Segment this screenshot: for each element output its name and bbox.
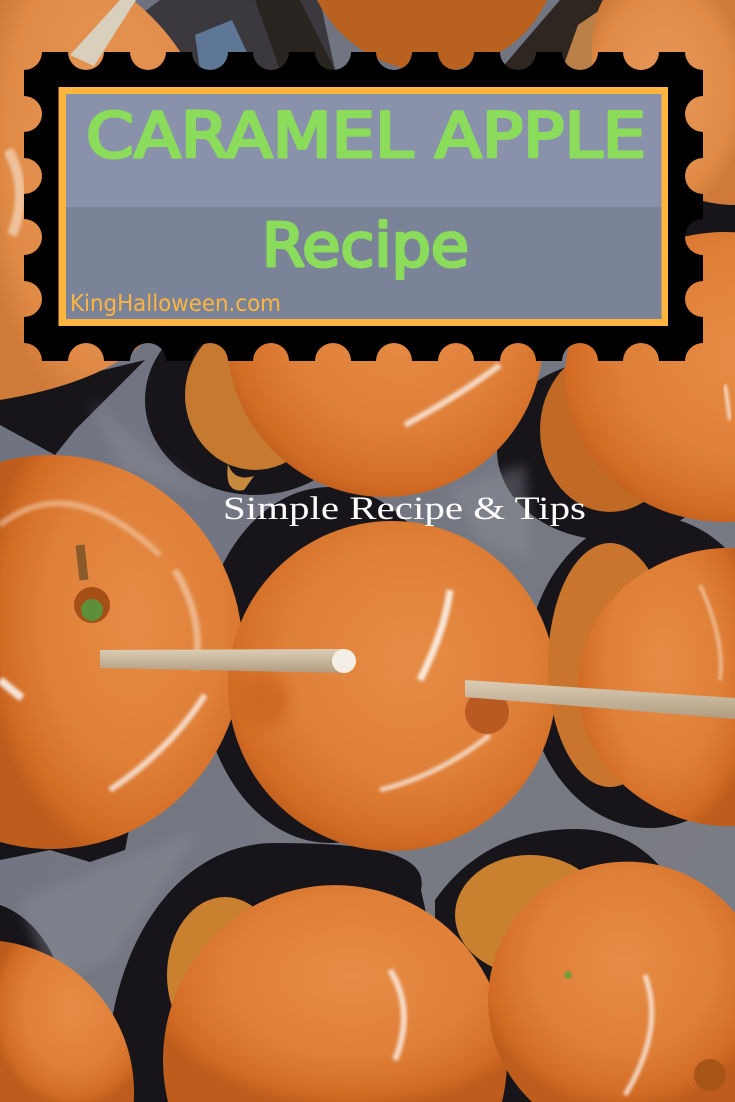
apple dimple (74, 545, 110, 623)
stamp frame (24, 52, 703, 361)
apple: top centre (317, 0, 547, 72)
subtitle: Simple Recipe & Tips (223, 491, 586, 527)
apple: bottom centre (163, 885, 507, 1102)
apple: top left (0, 0, 218, 400)
apple: bottom left (0, 941, 134, 1102)
stick: left apple (100, 649, 356, 673)
apple: left large (0, 455, 243, 849)
top glass tray pieces (120, 0, 603, 70)
apple: centre (228, 521, 556, 851)
stick: centre apple (465, 680, 735, 719)
apple: bottom right (455, 855, 735, 1102)
panel upper band (66, 94, 662, 207)
title second line: Recipe (262, 211, 469, 281)
panel lower band (66, 207, 662, 319)
apple: upper middle (185, 181, 543, 497)
stamp black background (24, 52, 703, 361)
apple: top right corner (592, 0, 735, 205)
apple: upper right (540, 232, 735, 522)
apple: right (548, 543, 735, 826)
tray glare (20, 400, 530, 980)
orange border (58, 87, 668, 326)
website credit: KingHalloween.com (70, 291, 281, 317)
title: CARAMEL APPLE (86, 99, 646, 172)
stick: top left (70, 0, 136, 66)
